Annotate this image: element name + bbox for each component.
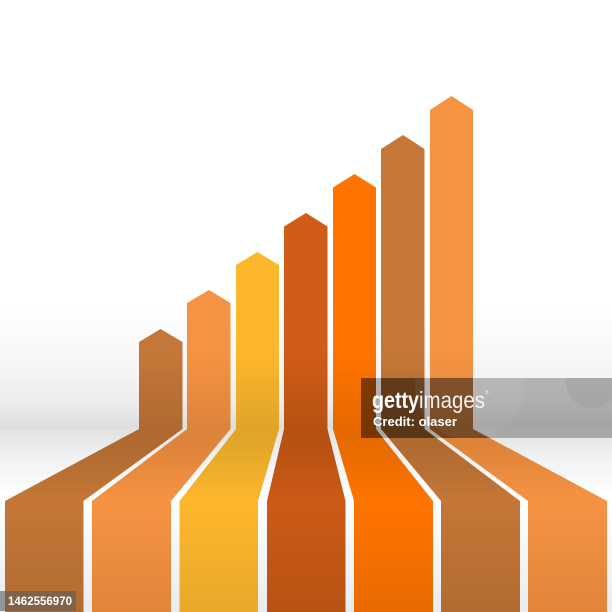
image id tag: 1462556970 [8,596,72,608]
watermark logo [372,387,489,413]
image id tag [0,591,76,611]
arrow bar 6 [381,135,520,612]
watermark logo: images [419,387,485,413]
arrow bar 3 [180,252,279,612]
watermark banner [361,378,612,438]
arrow bar 2 [92,290,230,612]
arrow bar 1 [5,329,182,612]
watermark credit: Credit: olaser [373,414,457,429]
arrow bar 4 [267,213,346,612]
watermark logo: getty [372,387,419,413]
arrow bar 7 [430,96,607,612]
watermark logo: ® [485,389,489,396]
arrow bar 5 [333,174,433,612]
